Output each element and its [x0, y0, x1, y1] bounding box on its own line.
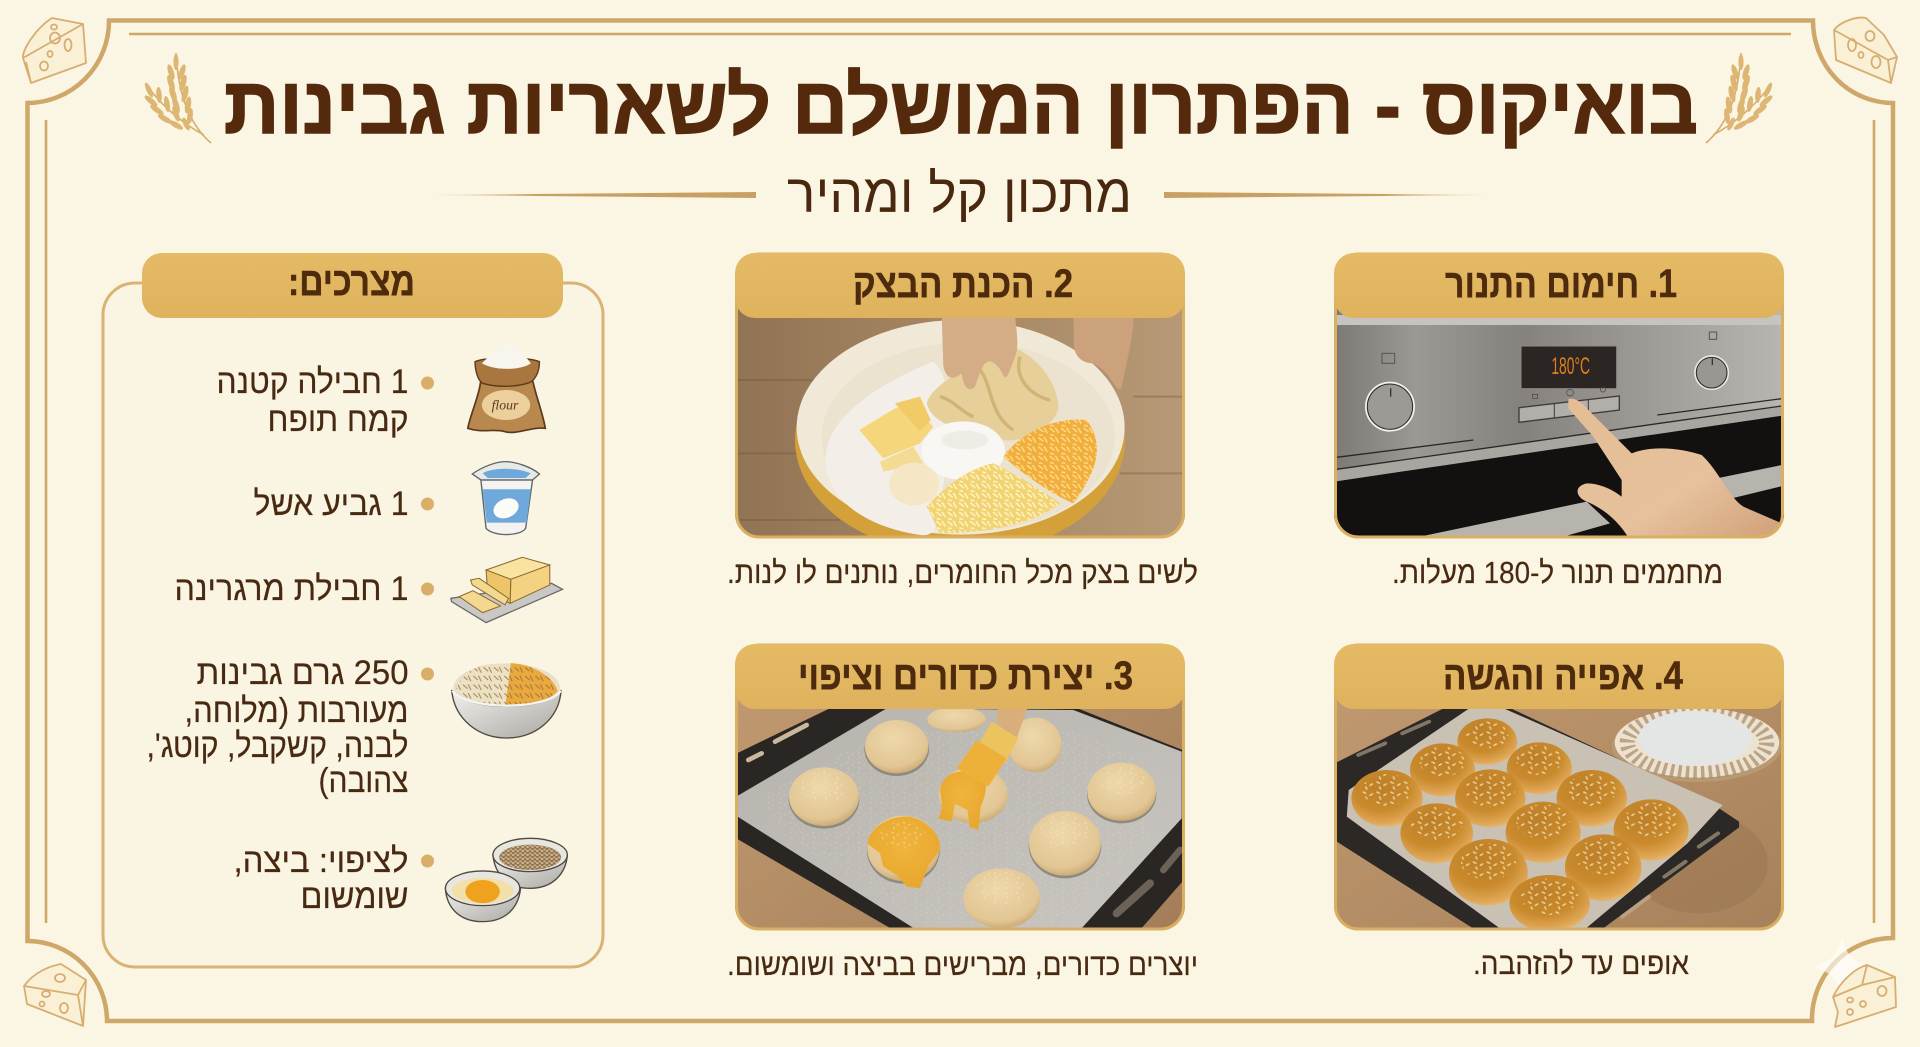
icon: cheese bottom-left	[24, 964, 86, 1026]
icon: butter on tray	[451, 557, 563, 623]
yogurt	[922, 421, 1005, 480]
panel: step 1 oven	[1334, 252, 1784, 584]
icon: flour sack	[468, 345, 545, 432]
butter	[859, 403, 933, 458]
photo border	[736, 645, 1184, 929]
caption: step 3: יוצרים כדורים, מברישים בביצה ושומשום.	[727, 947, 1198, 982]
ingredient: flour	[216, 345, 545, 439]
photo: baked buns on tray	[1334, 700, 1784, 928]
panel outline	[103, 283, 603, 967]
panel: step 4 baking	[1334, 644, 1784, 975]
caption: step 2: לשים בצק מכל החומרים, נותנים לו לנות.	[727, 555, 1198, 590]
dough	[927, 345, 1058, 441]
ingredient: egg and sesame	[234, 838, 567, 922]
photo border	[1336, 254, 1782, 537]
plate	[1612, 734, 1781, 782]
heading: step 1	[1334, 253, 1784, 318]
bowl	[795, 422, 1125, 536]
ingredient: flour: 1 חבילה קטנה	[216, 363, 408, 401]
display	[1521, 346, 1617, 389]
photo border	[736, 254, 1184, 537]
hand right	[1073, 315, 1133, 389]
ingredient: mixed cheeses	[146, 654, 561, 800]
heading: step 2: 2. הכנת הבצק	[853, 262, 1073, 306]
caption: step 4: אופים עד להזהבה.	[1473, 946, 1689, 981]
icon: cheese top-left	[23, 18, 86, 83]
ingredient: mixed cheeses: 250 גרם גבינות	[196, 654, 408, 692]
ingredient: yogurt: 1 גביע אשל	[254, 485, 408, 523]
heading: step 3: 3. יצירת כדורים וציפוי	[798, 654, 1133, 698]
ingredient: mixed cheeses: מעורבות (מלוחה,	[184, 692, 408, 730]
panel: ingredients	[103, 253, 603, 967]
icon: wheat left	[143, 53, 211, 143]
caption: step 1: מחממים תנור ל-180 מעלות.	[1392, 555, 1723, 590]
shadow	[1649, 823, 1768, 913]
ingredient: margarine: 1 חבילת מרגרינה	[174, 570, 408, 608]
panel: step 3 shaping	[720, 630, 1200, 990]
icon: wheat right	[1706, 53, 1774, 143]
heading: ingredients: מצרכים:	[288, 260, 415, 304]
photo: oven control panel: 180°C	[1551, 353, 1590, 380]
hand left	[942, 315, 1017, 389]
icon: cheese top-right	[1834, 18, 1897, 83]
ball	[889, 463, 939, 505]
knobs	[1366, 383, 1414, 431]
cheese	[1003, 420, 1097, 503]
icon: egg and sesame bowls	[445, 838, 567, 922]
tray	[1331, 705, 1739, 928]
heading: step 1: 1. חימום התנור	[1445, 262, 1677, 306]
title: בואיקוס - הפתרון המושלם לשאריות גבינות	[224, 61, 1698, 150]
ingredient: egg and sesame: לציפוי: ביצה,	[234, 842, 408, 880]
photo border	[1336, 645, 1782, 929]
subtitle: מתכון קל ומהיר	[787, 164, 1132, 224]
ingredient: yogurt	[254, 462, 539, 535]
panel: step 2 dough	[720, 240, 1200, 600]
photo: dough balls on tray	[735, 700, 1185, 928]
icon: bowl of grated cheese	[452, 663, 561, 738]
photo: mixing bowl	[735, 308, 1185, 536]
heading: step 2	[735, 253, 1185, 318]
brush	[996, 709, 1027, 738]
heading: step 3	[735, 644, 1185, 709]
icon: yogurt cup	[472, 462, 539, 535]
flour	[826, 362, 949, 535]
sesame scatter	[760, 730, 1153, 923]
buttons	[1519, 396, 1619, 422]
ingredient: mixed cheeses: צהובה)	[318, 762, 408, 800]
icon: sparkle watermark	[1812, 937, 1872, 997]
ingredient: flour: קמח תופח	[268, 401, 408, 439]
ingredient: mixed cheeses: לבנה, קשקבל, קוטג',	[146, 727, 408, 765]
heading: step 4: 4. אפייה והגשה	[1443, 654, 1684, 698]
photo: oven control panel	[1334, 308, 1784, 536]
subtitle	[419, 164, 1502, 224]
ingredient: margarine	[174, 557, 563, 623]
hand	[1568, 399, 1782, 540]
ingredient: egg and sesame: שומשום	[300, 878, 408, 916]
heading: ingredients	[142, 253, 563, 318]
icon: cheese bottom-right	[1833, 965, 1896, 1027]
icon: flour sack: flour	[492, 398, 519, 412]
heading: step 4	[1334, 644, 1784, 709]
buns	[1457, 718, 1517, 765]
